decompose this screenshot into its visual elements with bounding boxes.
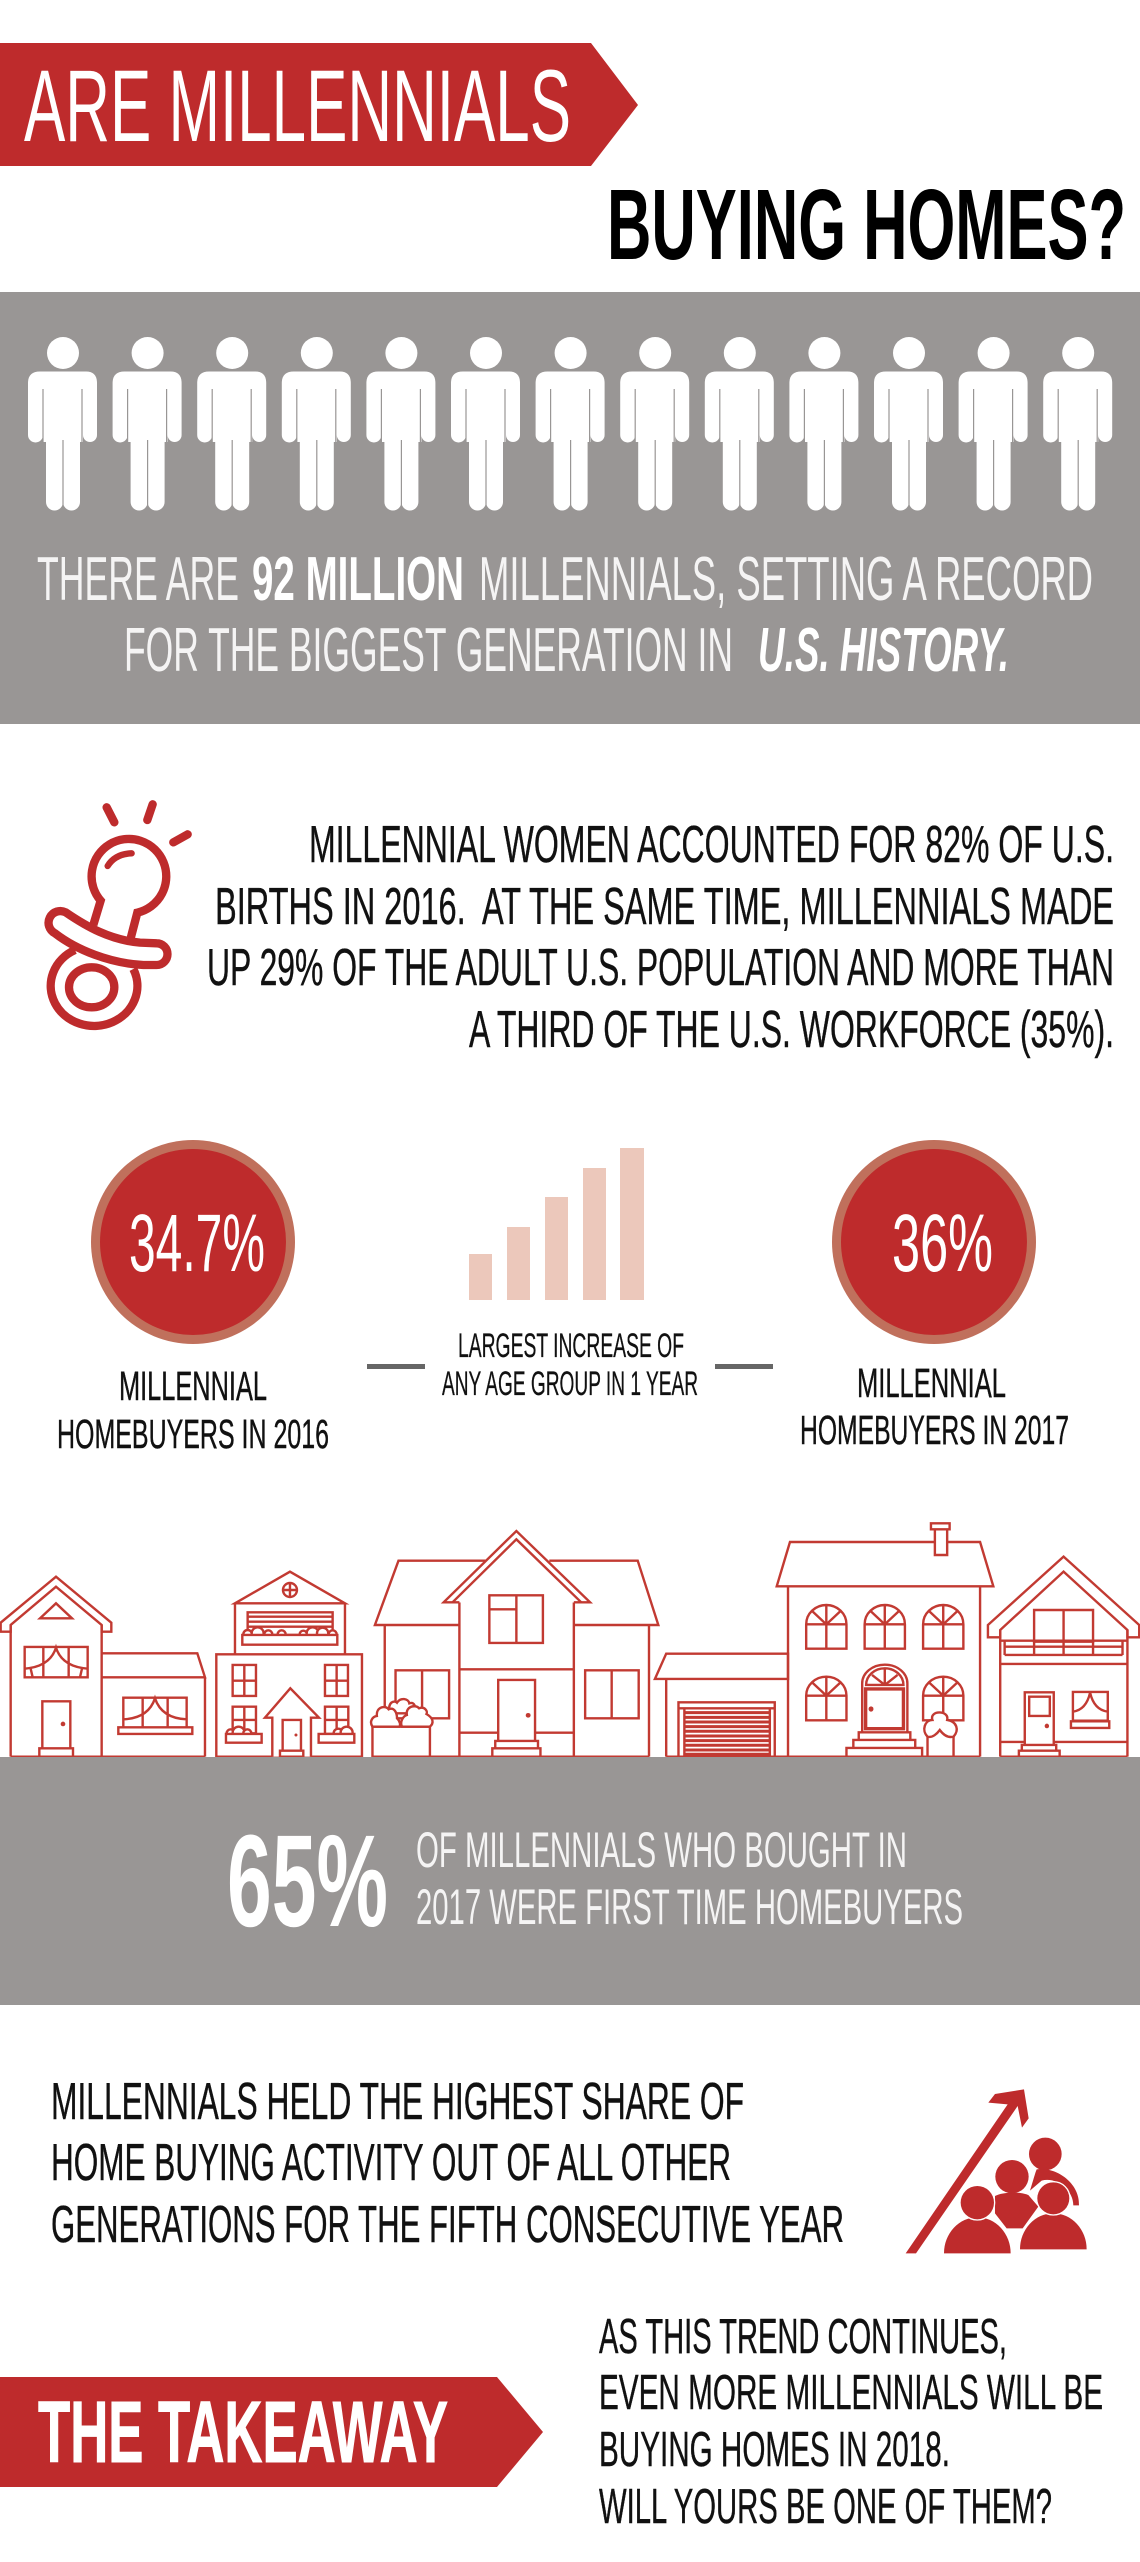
icon: garage (655, 1654, 788, 1757)
text: largest increase caption: ANY AGE GROUP IN 1 YEAR (442, 1365, 698, 1403)
icon: row of thirteen people (28, 337, 1112, 510)
panel: 65% first time homebuyers (0, 1757, 1140, 2005)
stat: 34.7% homebuyers in 2016 (57, 1140, 329, 1457)
text: births and workforce paragraph (207, 816, 1114, 1059)
text: 92 million statement: 92 MILLION (252, 545, 464, 614)
panel: 92 million millennials (0, 292, 1140, 724)
icon: house one (1, 1577, 205, 1757)
text: 92 million statement: THERE ARE (37, 545, 239, 614)
big number: 65%: 65% (227, 1807, 388, 1954)
icon: house four (777, 1523, 993, 1757)
text: 92 million statement (37, 545, 1093, 685)
banner: The Takeaway (0, 2377, 543, 2487)
stat: 36% homebuyers in 2017: 36% (892, 1198, 993, 1289)
stat: 36% homebuyers in 2017: MILLENNIAL (857, 1360, 1006, 1406)
stat: 34.7% homebuyers in 2016: HOMEBUYERS IN 2016 (57, 1411, 329, 1457)
title banner: Are Millennials (0, 43, 638, 166)
text: highest share paragraph (51, 2073, 844, 2254)
banner: The Takeaway: THE TAKEAWAY (38, 2384, 448, 2481)
icon: rising arrow over group of people (906, 2089, 1087, 2253)
icon: house three (371, 1531, 658, 1757)
stat: 34.7% homebuyers in 2016: 34.7% (129, 1198, 265, 1289)
text: takeaway conclusion (599, 2310, 1103, 2534)
icon: pacifier (49, 804, 188, 1026)
icon: house five (988, 1557, 1139, 1757)
stat: 36% homebuyers in 2017 (800, 1140, 1069, 1453)
illustration: row of houses, right group (371, 1523, 1139, 1757)
title banner: Are Millennials: ARE MILLENNIALS (24, 49, 571, 163)
bar chart: rising bars (469, 1148, 644, 1300)
icon: house two (216, 1572, 362, 1757)
text: largest increase caption: LARGEST INCREASE OF (458, 1327, 684, 1365)
text: first time homebuyers (416, 1822, 963, 1935)
text: largest increase caption (367, 1327, 773, 1403)
illustration: row of houses, left pair (1, 1572, 362, 1757)
stat: 34.7% homebuyers in 2016: MILLENNIAL (119, 1363, 267, 1409)
